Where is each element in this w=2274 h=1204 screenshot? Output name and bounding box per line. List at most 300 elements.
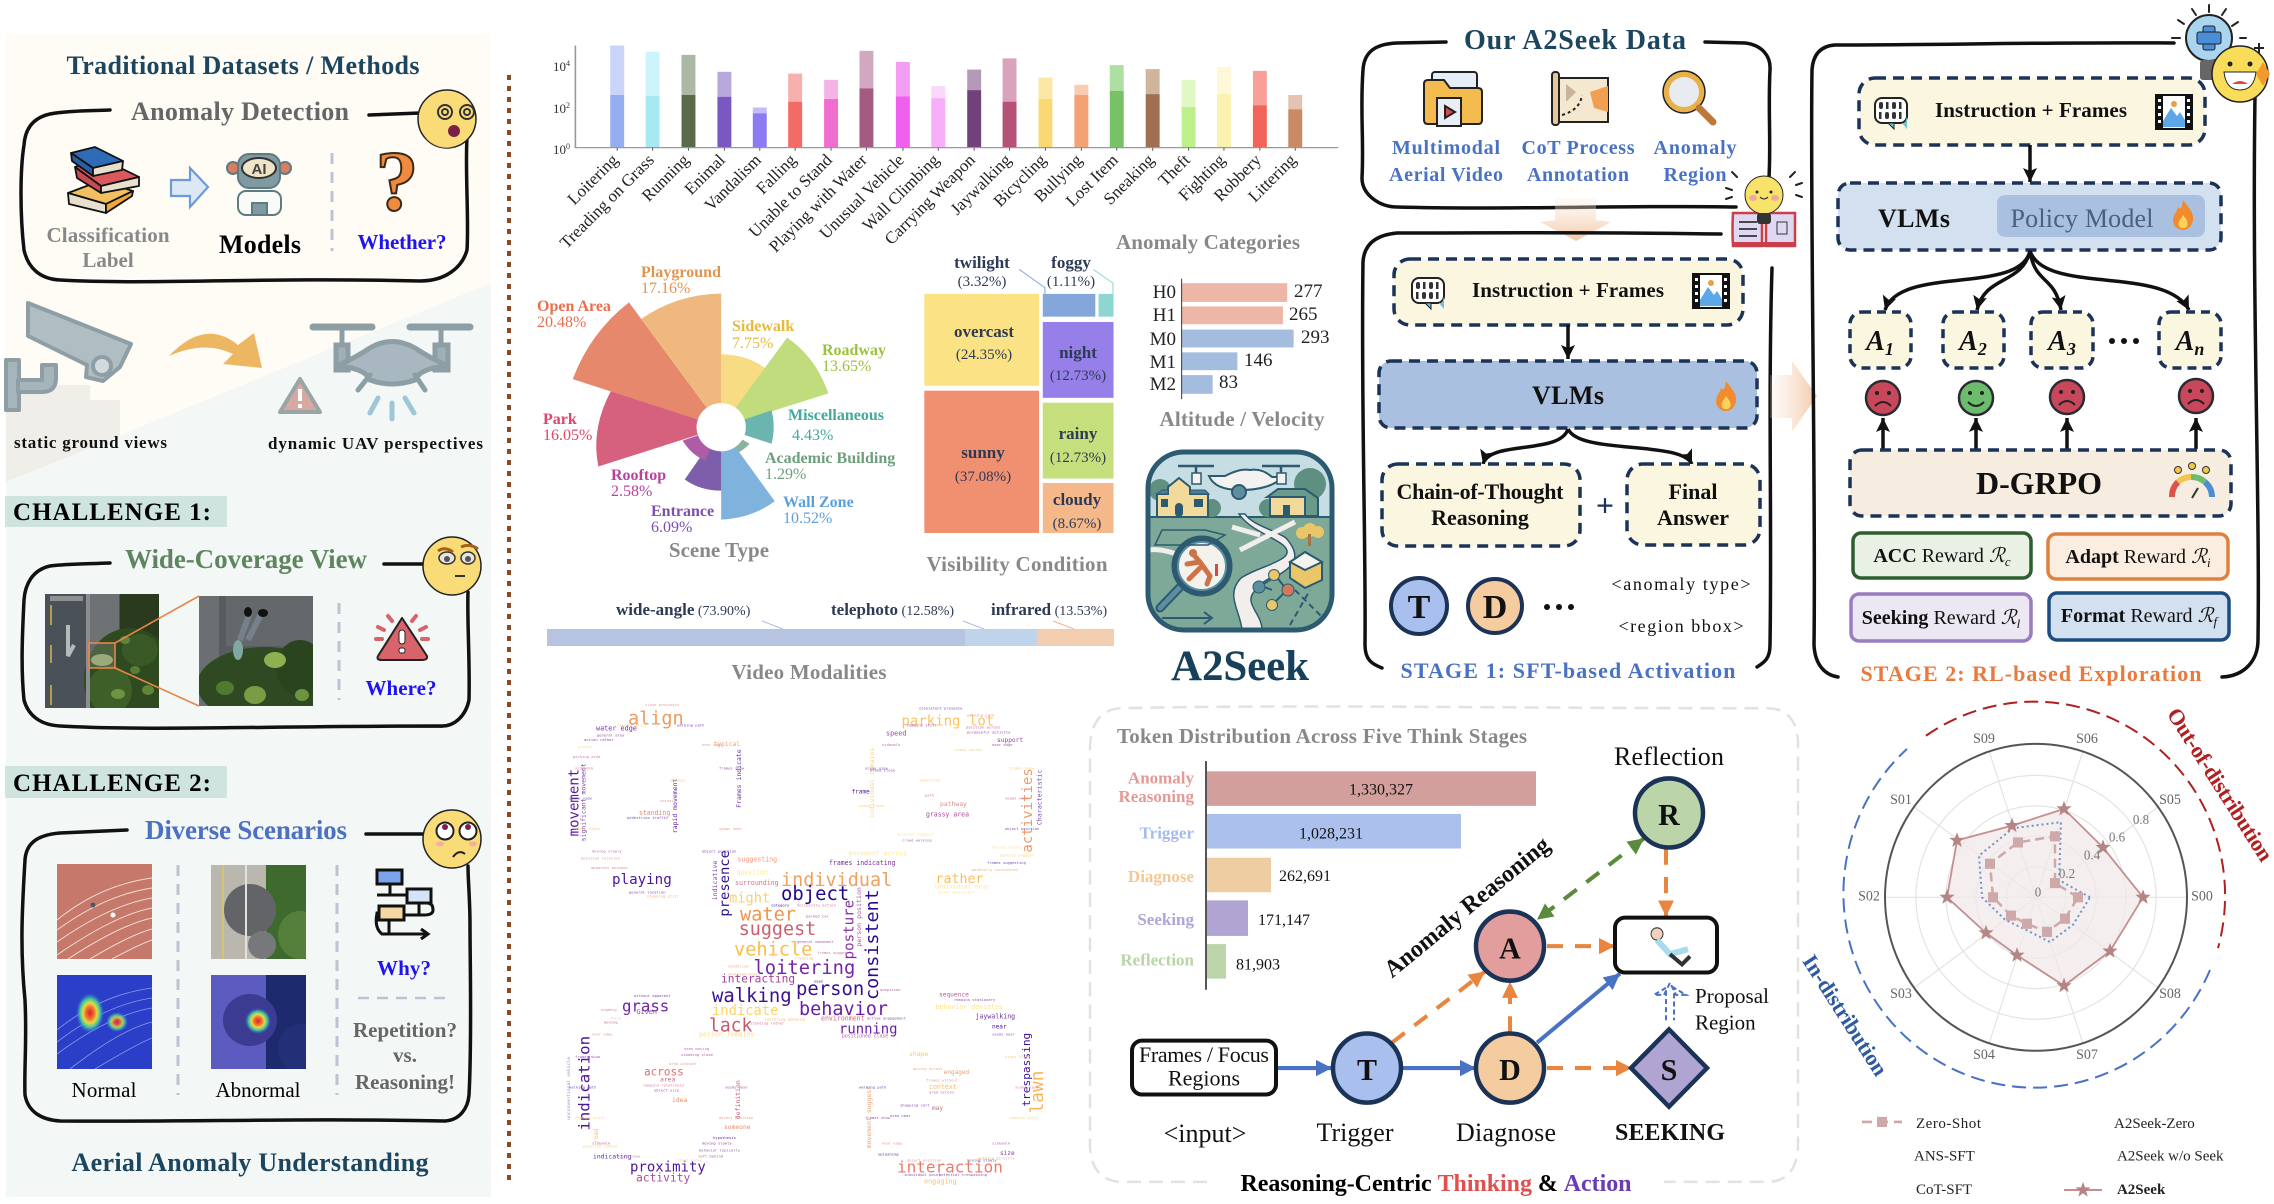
category labels: Fighting <box>1175 150 1229 205</box>
word cloud: drone shaped: parking lot <box>902 713 994 730</box>
word cloud: drone shaped: moving slowly <box>702 1140 732 1145</box>
token bar values: 1,330,327 <box>1349 782 1413 799</box>
symbol: plus: + <box>1596 487 1614 523</box>
word cloud: drone shaped: road <box>593 1128 600 1143</box>
word cloud: drone shaped: person position <box>855 887 863 947</box>
series: Zero-Shot <box>1990 836 2078 932</box>
boxes: actions: 2 <box>1977 339 1987 359</box>
word cloud: drone shaped: frames suggesting <box>987 860 1026 865</box>
label: proposal region <box>1695 984 1769 1034</box>
modality labels <box>616 600 1107 619</box>
word cloud: drone shaped: sidewalk <box>992 1140 1011 1145</box>
word cloud: drone shaped: left behind <box>698 1153 723 1159</box>
word cloud: drone shaped: lawn <box>1028 1071 1048 1113</box>
word cloud: drone shaped: something <box>920 777 941 782</box>
word cloud: drone shaped: rapid movement <box>671 778 679 833</box>
word cloud: drone shaped: individual point <box>904 1172 941 1177</box>
label: dynamic UAV perspectives: dynamic UAV perspectives <box>268 434 483 453</box>
boxes: actions: 1 <box>1885 339 1894 359</box>
icons: reward faces <box>1866 379 2213 415</box>
output tags <box>1612 574 1750 636</box>
rose labels: 17.16% <box>641 280 690 297</box>
word cloud: drone shaped: size <box>1000 1150 1015 1157</box>
token bar values: 1,028,231 <box>1299 825 1363 842</box>
boxes: actions: A <box>2048 326 2067 357</box>
labels: data features: Region <box>1664 164 1726 186</box>
box: instruction and frames <box>1394 259 1743 325</box>
word cloud: drone shaped: walking <box>712 985 792 1007</box>
word cloud: drone shaped: suggest <box>739 919 816 940</box>
bar values: 265 <box>1289 304 1318 325</box>
bar names: H1 <box>1153 305 1176 326</box>
y axis labels: 10 <box>553 142 566 157</box>
word cloud: drone shaped: someone <box>724 1124 751 1131</box>
labels: data features: CoT Process <box>1522 137 1635 159</box>
treemap labels: (12.73%) <box>1050 368 1106 384</box>
icon: skeptical emoji <box>423 537 481 595</box>
treemap labels: night <box>1059 343 1097 362</box>
word cloud: drone shaped: question <box>736 868 768 876</box>
bar values: 83 <box>1219 372 1238 393</box>
word cloud: drone shaped: seen <box>814 979 823 984</box>
word cloud: drone shaped: person remains <box>699 1031 755 1039</box>
label: repetition vs reasoning <box>353 1018 457 1094</box>
arc: in-distribution <box>1843 749 2210 1088</box>
token bar labels: Reflection <box>1120 950 1194 969</box>
boxes: actions <box>1850 312 2221 368</box>
category labels: Carrying Weapon <box>881 150 979 248</box>
icon: surveillance camera <box>6 303 131 410</box>
labels: data features: Anomaly <box>1654 137 1736 159</box>
arrow: proposal region <box>1654 983 1686 1020</box>
word cloud: drone shaped: walking path <box>967 712 994 717</box>
horizontal bars <box>1182 279 1294 399</box>
radial tick labels: 0.6 <box>2109 829 2126 844</box>
word cloud: drone shaped: general location <box>629 889 666 894</box>
treemap labels: sunny <box>961 443 1005 462</box>
word cloud: drone shaped: individual <box>781 870 892 891</box>
box: diverse scenarios <box>22 830 471 1121</box>
word cloud: drone shaped: scene view <box>1015 1084 1039 1089</box>
arrow: to VLMs <box>2028 145 2032 182</box>
label: repetition vs reasoning: Repetition? <box>353 1018 457 1042</box>
legend: CoT-SFT <box>1916 1182 1972 1198</box>
word cloud: drone shaped: scene view <box>865 765 889 770</box>
label: trigger: Trigger <box>1316 1118 1394 1147</box>
chart: video modalities bar <box>547 600 1114 684</box>
legend: A2Seek w/o Seek <box>2117 1148 2224 1165</box>
rose labels: Academic Building <box>765 450 895 467</box>
word cloud: drone shaped <box>566 702 1048 1185</box>
treemap cells <box>924 269 1114 533</box>
stacked bar <box>547 621 1114 646</box>
dashed outline <box>1090 706 1798 1182</box>
word cloud: drone shaped: category <box>771 902 790 907</box>
chart: scene type rose <box>537 264 895 562</box>
word cloud: drone shaped: seems near <box>992 1032 1016 1037</box>
heading: challenge 2: CHALLENGE 2: <box>13 770 211 797</box>
y axis labels: 10 <box>553 101 566 116</box>
word cloud: drone shaped: scene view <box>617 1153 641 1159</box>
heading: anomaly detection: Anomaly Detection <box>131 97 350 126</box>
word cloud: drone shaped: water edge <box>596 725 637 733</box>
icon: robot <box>227 154 291 215</box>
logo wordmark: A2Seek <box>1171 643 1309 690</box>
divider <box>358 997 453 999</box>
category labels <box>556 150 1300 256</box>
word cloud: drone shaped: definition <box>734 1080 742 1119</box>
radar outer ring <box>1885 744 2187 1051</box>
word cloud: drone shaped: movement across <box>848 850 907 858</box>
word cloud: drone shaped: frame <box>852 789 870 796</box>
arrow: ground to UAV <box>169 333 262 368</box>
word cloud: drone shaped: frames show <box>865 1115 891 1120</box>
token bar values: 262,691 <box>1279 868 1331 885</box>
icon: video folder <box>1424 72 1482 126</box>
box: ACC reward: c <box>2005 554 2011 569</box>
word cloud: drone shaped: running <box>839 1021 898 1038</box>
word cloud: drone shaped: grass <box>622 997 669 1016</box>
word cloud: drone shaped: remains still <box>617 723 647 728</box>
heading: stage 2: STAGE 2: RL-based Exploration <box>1860 661 2202 686</box>
box: VLMs and policy model <box>1838 183 2221 250</box>
box: frames focus regions: Frames / Focus <box>1139 1042 1269 1067</box>
word cloud: drone shaped: posture <box>841 900 857 959</box>
word cloud: drone shaped: position relative <box>581 856 621 861</box>
word cloud: drone shaped: deliberate action <box>797 902 836 907</box>
rose labels: 1.29% <box>765 466 806 483</box>
word cloud: drone shaped: ground <box>578 744 592 749</box>
divider <box>338 603 340 700</box>
dividers <box>178 865 337 1095</box>
icon: question mark: ? <box>376 133 418 229</box>
legend <box>1862 1116 2224 1198</box>
panel outline <box>1363 233 1772 668</box>
arrow: dataset to model <box>171 168 208 207</box>
word cloud: drone shaped: align <box>628 708 684 730</box>
word cloud: drone shaped: active engagement <box>867 1015 906 1020</box>
box: chain of thought <box>1382 464 1580 546</box>
rose labels: 10.52% <box>783 510 832 527</box>
box: VLMs <box>1379 361 1757 428</box>
token bar labels: Anomaly <box>1128 768 1194 788</box>
treemap labels: (8.67%) <box>1053 516 1101 532</box>
word cloud: drone shaped: frames suggest <box>817 950 849 955</box>
word cloud: drone shaped: walking directly <box>978 1155 1015 1161</box>
token bar values: 171,147 <box>1258 912 1310 929</box>
label: diagnose: Diagnose <box>1456 1118 1556 1147</box>
label: proposal region: Proposal <box>1695 984 1769 1008</box>
legend: Zero-Shot <box>1916 1116 1982 1132</box>
box: ACC reward: ACC Reward ℛ <box>1873 545 2005 567</box>
box: fallen person <box>1615 918 1717 973</box>
rose labels: 7.75% <box>732 335 773 352</box>
word cloud: drone shaped: near <box>992 1023 1007 1030</box>
label: where: Where? <box>366 676 436 700</box>
arrows: to actions <box>1885 251 2189 310</box>
word cloud: drone shaped: pathway <box>940 800 967 808</box>
word cloud: drone shaped: individual remains <box>868 748 876 818</box>
rose labels: Park <box>543 411 577 428</box>
axis labels: S05 <box>2159 792 2181 808</box>
labels: data features: Aerial Video <box>1389 164 1503 186</box>
word cloud: drone shaped: urgency <box>601 1007 618 1012</box>
label: input: <input> <box>1164 1119 1246 1148</box>
icon: frames <box>2156 95 2192 129</box>
word cloud: drone shaped: shopping cart <box>900 1103 930 1108</box>
word cloud: drone shaped: near edge <box>702 742 723 747</box>
legend: ANS-SFT <box>1914 1148 1975 1165</box>
box: format reward <box>2049 593 2229 640</box>
label: in-distribution: In-distribution <box>1798 950 1893 1080</box>
word cloud: drone shaped: position remain <box>583 1143 617 1148</box>
word cloud: drone shaped: area across <box>929 1089 954 1094</box>
word cloud: drone shaped: behavior deviates <box>936 1003 1003 1011</box>
chart: visibility treemap <box>924 253 1114 576</box>
heading: altitude velocity: Altitude / Velocity <box>1160 407 1325 431</box>
word cloud: drone shaped: consistent presence <box>919 705 963 710</box>
word cloud: drone shaped: vehicle <box>734 939 812 960</box>
word cloud: drone shaped: near edge <box>992 742 1013 747</box>
radar grid <box>1885 751 2187 1044</box>
bar names: H0 <box>1153 282 1176 303</box>
box: final answer: Answer <box>1657 505 1729 530</box>
token bar labels: Trigger <box>1140 823 1194 842</box>
category labels: Lost Item <box>1062 150 1122 210</box>
treemap labels: (1.11%) <box>1047 274 1095 290</box>
axis labels: S07 <box>2076 1047 2098 1063</box>
word cloud: drone shaped: remains relatively <box>643 1082 685 1087</box>
node: D <box>1468 579 1522 633</box>
zoom connector <box>89 596 199 706</box>
word cloud: drone shaped: casual <box>660 798 674 803</box>
word cloud: drone shaped: loitering behavior <box>765 1016 807 1021</box>
word cloud: drone shaped: Characteristic <box>1036 769 1044 825</box>
panel: our A2Seek data <box>1362 25 1802 247</box>
word cloud: drone shaped: frames show <box>719 765 745 770</box>
word cloud: drone shaped: playing <box>612 872 672 888</box>
treemap labels: foggy <box>1051 253 1091 272</box>
word cloud: drone shaped: indication <box>576 1036 593 1131</box>
word cloud: drone shaped: moving across <box>913 1066 943 1071</box>
word cloud: drone shaped: force <box>610 1015 622 1020</box>
box: final answer <box>1627 464 1760 545</box>
icon: chat <box>1412 278 1444 309</box>
word cloud: drone shaped: hypothesis <box>713 1135 736 1140</box>
rose labels: Entrance <box>651 503 714 520</box>
word cloud: drone shaped: engaging <box>924 1177 957 1185</box>
bar names: M2 <box>1150 374 1176 395</box>
word cloud: drone shaped: walking path <box>677 723 704 728</box>
word cloud: drone shaped: frames indicating <box>829 859 896 867</box>
word cloud: drone shaped: might <box>729 890 770 906</box>
treemap labels <box>954 253 1106 532</box>
node: T <box>1391 578 1447 634</box>
word cloud: drone shaped: path <box>925 793 934 798</box>
word cloud: drone shaped: area near <box>890 1113 911 1118</box>
treemap labels: (37.08%) <box>955 469 1011 485</box>
heading: reasoning-centric thinking and action: Reasoning-Centric Thinking & Action <box>1240 1170 1632 1197</box>
label: repetition vs reasoning: Reasoning! <box>355 1070 455 1094</box>
series: A2Seek <box>1947 809 2143 986</box>
arrow: to VLMs <box>1566 325 1570 359</box>
icon: fire <box>2173 200 2193 230</box>
box: seeking reward: Seeking Reward ℛ <box>1862 607 2017 629</box>
word cloud: drone shaped: object size <box>654 1087 680 1092</box>
word cloud: drone shaped: object position <box>702 849 736 854</box>
word cloud: drone shaped: presence <box>717 850 733 917</box>
label: models: Models <box>219 230 301 259</box>
word cloud: drone shaped: jaywalking <box>976 1012 1015 1020</box>
word cloud: drone shaped: interacting <box>721 972 795 985</box>
word cloud: drone shaped: remains stationary <box>954 997 996 1002</box>
word cloud: drone shaped: suggesting <box>737 856 777 864</box>
graph arrows <box>1276 838 1666 1068</box>
word cloud: drone shaped: crowd walking <box>902 837 932 842</box>
category labels: Littering <box>1244 150 1300 206</box>
rose labels: Playground <box>641 264 721 281</box>
word cloud: drone shaped: idea <box>672 1096 688 1104</box>
labels: data features: Annotation <box>1527 164 1629 186</box>
chart: token bars <box>1206 761 1536 990</box>
word cloud: drone shaped: near edge <box>882 1140 903 1145</box>
arc: out-of-distribution <box>1926 702 2225 948</box>
markers: squares <box>1985 831 2083 937</box>
heading: anomaly categories: Anomaly Categories <box>1116 230 1300 254</box>
chart: radar <box>1798 702 2274 1198</box>
word cloud: drone shaped: action rather <box>584 737 614 742</box>
word cloud: drone shaped: indicate <box>712 1003 778 1019</box>
heading: video modalities: Video Modalities <box>732 660 886 684</box>
output tags: <anomaly type> <box>1612 574 1750 594</box>
category labels: Sneaking <box>1100 150 1158 209</box>
box: format reward: Format Reward ℛ <box>2061 605 2213 627</box>
panel: problem overview <box>5 34 491 1197</box>
panel outline <box>1812 43 2258 677</box>
word cloud: drone shaped: walking path <box>569 1084 596 1089</box>
label: whether: Whether? <box>358 230 446 254</box>
word cloud: drone shaped: consistent <box>862 889 883 1000</box>
label: static ground views: static ground views <box>14 433 167 452</box>
word cloud: drone shaped: standing close <box>681 1052 714 1057</box>
axis labels <box>1858 731 2213 1063</box>
icon: frames <box>1693 274 1729 308</box>
chart: anomaly categories bars <box>553 45 1338 256</box>
word cloud: drone shaped: activity <box>636 1170 690 1184</box>
box: frames focus regions <box>1132 1041 1276 1094</box>
word cloud: drone shaped: stand nearby <box>955 747 983 752</box>
token bar labels: Reasoning <box>1118 787 1194 806</box>
word cloud: drone shaped: sequence <box>939 991 969 998</box>
word cloud: drone shaped: frames without <box>926 1077 958 1082</box>
word cloud: drone shaped: indicating <box>593 1152 632 1161</box>
radial tick labels: 0 <box>2035 884 2042 899</box>
word cloud: drone shaped: parked car <box>806 914 830 919</box>
output tags: <region bbox> <box>1618 616 1744 636</box>
word cloud: drone shaped: movement <box>567 769 582 836</box>
node: T: T <box>1408 589 1431 626</box>
word cloud: drone shaped: standing <box>639 809 670 817</box>
heading: challenge 1: CHALLENGE 1: <box>13 499 211 526</box>
panel: stage 2 RL-based exploration <box>1812 5 2270 686</box>
box: instruction and frames <box>1859 78 2205 145</box>
icon: alert triangle <box>376 616 428 660</box>
box: VLMs and policy model: VLMs <box>1878 204 1950 233</box>
category labels: Vandalism <box>701 150 765 215</box>
panel: token distribution and reasoning graph <box>1090 706 1798 1197</box>
label: classification label <box>46 223 170 272</box>
y axis labels: 4 <box>566 59 570 68</box>
icon: flow diagram <box>376 870 433 939</box>
box: adapt reward: i <box>2207 555 2211 570</box>
node: Reflection <box>1635 778 1703 848</box>
word cloud: drone shaped: close proximity <box>645 702 680 707</box>
box: instruction and frames: Instruction + Frames <box>1935 98 2127 122</box>
word cloud: drone shaped: seems near <box>1005 796 1029 801</box>
word cloud: drone shaped: stays close <box>859 803 885 808</box>
word cloud: drone shaped: grassy area <box>926 811 969 819</box>
word cloud: drone shaped: stand close <box>870 767 896 772</box>
boxes: actions: n <box>2194 339 2204 359</box>
word cloud: drone shaped: moving slowly <box>992 845 1022 850</box>
word cloud: drone shaped: potential trespassing <box>939 1172 987 1177</box>
category labels: Bullying <box>1030 150 1086 206</box>
icon: fire <box>1716 381 1736 411</box>
y axis labels: 2 <box>566 101 570 110</box>
treemap labels: (24.35%) <box>956 347 1012 363</box>
word cloud: drone shaped: Given <box>636 1008 657 1016</box>
node: Trigger <box>1333 1034 1401 1103</box>
modality labels: infrared (13.53%) <box>991 600 1107 619</box>
word cloud: drone shaped: remains still <box>1009 1115 1039 1120</box>
node: Diagnose: D <box>1499 1053 1521 1087</box>
word cloud: drone shaped: rather <box>936 872 983 887</box>
treemap labels: overcast <box>954 322 1014 341</box>
word cloud: drone shaped: vandalism <box>728 963 749 968</box>
axis labels: S04 <box>1973 1047 1995 1063</box>
box: frames focus regions: Regions <box>1168 1065 1240 1090</box>
word cloud: drone shaped: object position <box>1005 826 1039 831</box>
word cloud: drone shaped: seems near <box>725 1084 749 1089</box>
icon: lamp and smile <box>2172 5 2270 102</box>
label: reflection: Reflection <box>1614 742 1724 771</box>
box: ACC reward <box>1853 533 2031 578</box>
arrow: data to stage 1 <box>1540 198 1611 241</box>
node: Seeking: S <box>1661 1053 1677 1087</box>
panel outline <box>1362 42 1770 208</box>
node: Reflection: R <box>1658 798 1681 832</box>
axis labels: S01 <box>1890 792 1912 808</box>
image: normal track <box>57 864 152 959</box>
icon: treasure map <box>1552 72 1608 125</box>
rose labels: Roadway <box>822 342 886 359</box>
word cloud: drone shaped: unconventional vehicle <box>566 1057 572 1120</box>
word cloud: drone shaped: stays close <box>575 826 601 831</box>
axis labels: S02 <box>1858 888 1880 904</box>
icon: lamp and book <box>1726 172 1802 247</box>
radial tick labels: 0.8 <box>2133 812 2150 827</box>
rose wedges <box>573 293 828 520</box>
word cloud: drone shaped: engaged <box>944 1069 970 1076</box>
word cloud: drone shaped: person <box>796 978 864 1000</box>
word cloud: drone shaped: purposeful activity <box>967 730 1011 735</box>
label: seeking: SEEKING <box>1615 1119 1725 1146</box>
word cloud: drone shaped: significant movement <box>580 763 587 841</box>
legend: A2Seek-Zero <box>2114 1116 2195 1132</box>
image: aerial view <box>45 594 159 708</box>
axis labels: S00 <box>2191 888 2213 904</box>
bars <box>575 45 1338 151</box>
